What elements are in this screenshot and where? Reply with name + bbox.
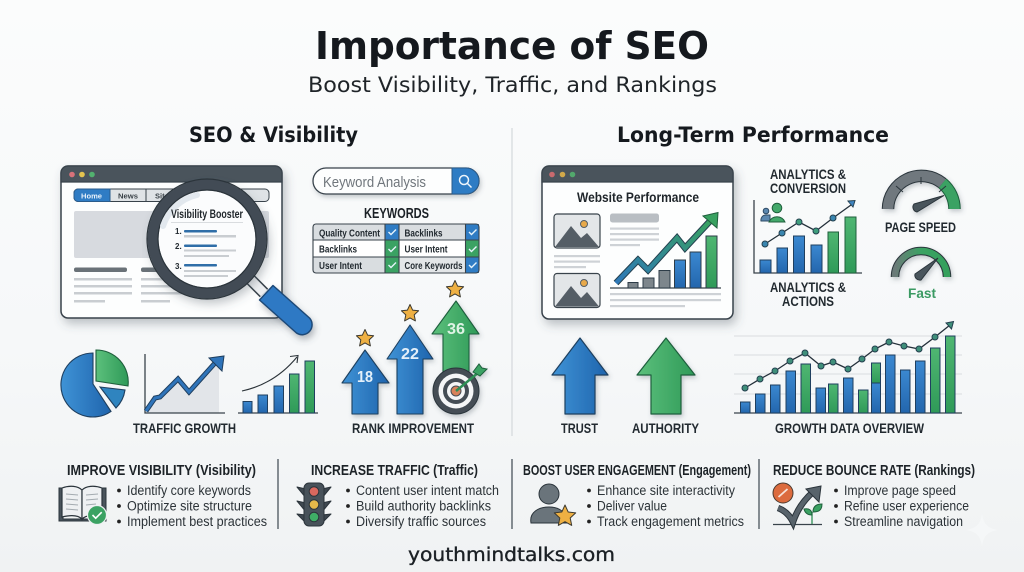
bullet list: Refine user experience	[844, 498, 969, 514]
arrow: rank 22: 22	[401, 346, 419, 363]
search bar	[313, 168, 479, 194]
bullet list: Deliver value	[597, 498, 667, 514]
icon: growth check with sprout	[773, 483, 822, 524]
website performance browser	[542, 166, 733, 319]
fast gauge	[895, 251, 947, 280]
bullet list	[587, 483, 744, 529]
label: trust: TRUST	[561, 420, 598, 436]
keywords table: User Intent	[319, 260, 362, 272]
bullet list: Content user intent match	[356, 483, 499, 498]
stars	[356, 280, 464, 346]
magnifying glass: 2.	[175, 242, 182, 251]
label: authority: AUTHORITY	[632, 420, 700, 436]
magnifying glass: 3.	[175, 262, 182, 271]
search bar: Keyword Analysis	[323, 175, 426, 191]
panel heading: BOOST USER ENGAGEMENT (Engagement)	[523, 462, 751, 479]
keywords table: User Intent	[404, 244, 448, 256]
bullet list: Streamline navigation	[844, 514, 963, 529]
panel: boost user engagement	[523, 462, 751, 529]
browser window: Home	[81, 192, 102, 200]
page speed gauge	[888, 176, 954, 212]
magnifying glass: Visibility Booster	[171, 207, 243, 221]
browser window	[61, 166, 282, 318]
panel: reduce bounce rate	[773, 462, 975, 529]
target icon	[433, 364, 487, 414]
browser window: Site	[155, 192, 169, 200]
arrow: rank 18	[342, 350, 389, 414]
browser window: News	[118, 192, 138, 200]
panel heading: IMPROVE VISIBILITY (Visibility)	[67, 462, 256, 479]
bullet list	[117, 483, 267, 529]
label: page speed: PAGE SPEED	[885, 220, 956, 235]
label: fast: Fast	[908, 285, 936, 301]
bullet list: Build authority backlinks	[356, 498, 491, 514]
magnifying glass	[147, 179, 312, 335]
arrow: rank 36: 36	[447, 321, 465, 338]
bullet list: Optimize site structure	[127, 498, 252, 514]
pie chart	[61, 350, 128, 417]
image placeholder 2	[554, 274, 600, 308]
keywords table: Core Keywords	[404, 260, 463, 272]
magnifying glass: 1.	[175, 227, 182, 236]
bullet list: Diversify traffic sources	[356, 514, 486, 529]
title: Importance of SEO	[315, 24, 709, 68]
arrow: authority	[637, 338, 695, 414]
bullet list: Track engagement metrics	[597, 514, 744, 529]
label: rank improvement: RANK IMPROVEMENT	[352, 420, 474, 436]
arrow: trust	[552, 338, 608, 414]
growth data overview chart	[734, 322, 962, 413]
panel: increase traffic	[297, 462, 499, 529]
bullet list: Implement best practices	[127, 514, 267, 529]
heading: Long-Term Performance: Long-Term Performance	[617, 123, 889, 147]
ranking arrows with stars	[342, 280, 487, 414]
bullet list: Improve page speed	[844, 483, 956, 498]
keywords table	[313, 205, 479, 273]
bar chart with curved arrow	[238, 356, 318, 413]
label: growth data overview: GROWTH DATA OVERVIEW	[775, 420, 925, 436]
icon: open book	[59, 486, 106, 524]
panel title: Website Performance	[577, 190, 699, 205]
label: analytics & actions: ACTIONS	[782, 294, 834, 309]
keywords table: Backlinks	[319, 244, 357, 256]
subtitle: Boost Visibility, Traffic, and Rankings	[308, 73, 717, 97]
label: analytics & conversion: ANALYTICS &	[770, 167, 846, 182]
image placeholder 1	[554, 214, 600, 248]
keywords table: Backlinks	[404, 228, 443, 240]
performance chart	[610, 212, 721, 288]
icon: traffic light	[297, 483, 331, 526]
illustration: browser window with magnifier	[61, 166, 312, 335]
arrow: rank 22	[387, 325, 433, 414]
line chart: traffic growth	[145, 354, 225, 413]
panel heading: INCREASE TRAFFIC (Traffic)	[311, 462, 478, 479]
keywords table: Quality Content	[319, 228, 380, 240]
label: traffic growth: TRAFFIC GROWTH	[133, 420, 236, 436]
label: analytics & actions: ANALYTICS &	[770, 280, 846, 295]
bullet list: Identify core keywords	[127, 483, 251, 498]
bullet list	[346, 483, 499, 529]
arrow: rank 36	[432, 301, 479, 376]
bullet list	[834, 483, 969, 529]
people icon	[761, 203, 785, 222]
arrow: rank 18: 18	[357, 369, 373, 386]
icon: user with star	[531, 484, 576, 525]
bullet list: Enhance site interactivity	[597, 483, 735, 498]
keywords heading: KEYWORDS	[364, 205, 429, 222]
label: analytics & conversion: CONVERSION	[770, 181, 846, 196]
analytics combo chart	[754, 200, 862, 273]
panel: improve visibility	[59, 462, 267, 529]
heading: SEO & Visibility: SEO & Visibility	[189, 123, 358, 147]
footer url: youthmindtalks.com	[408, 545, 615, 566]
panel heading: REDUCE BOUNCE RATE (Rankings)	[773, 462, 975, 479]
